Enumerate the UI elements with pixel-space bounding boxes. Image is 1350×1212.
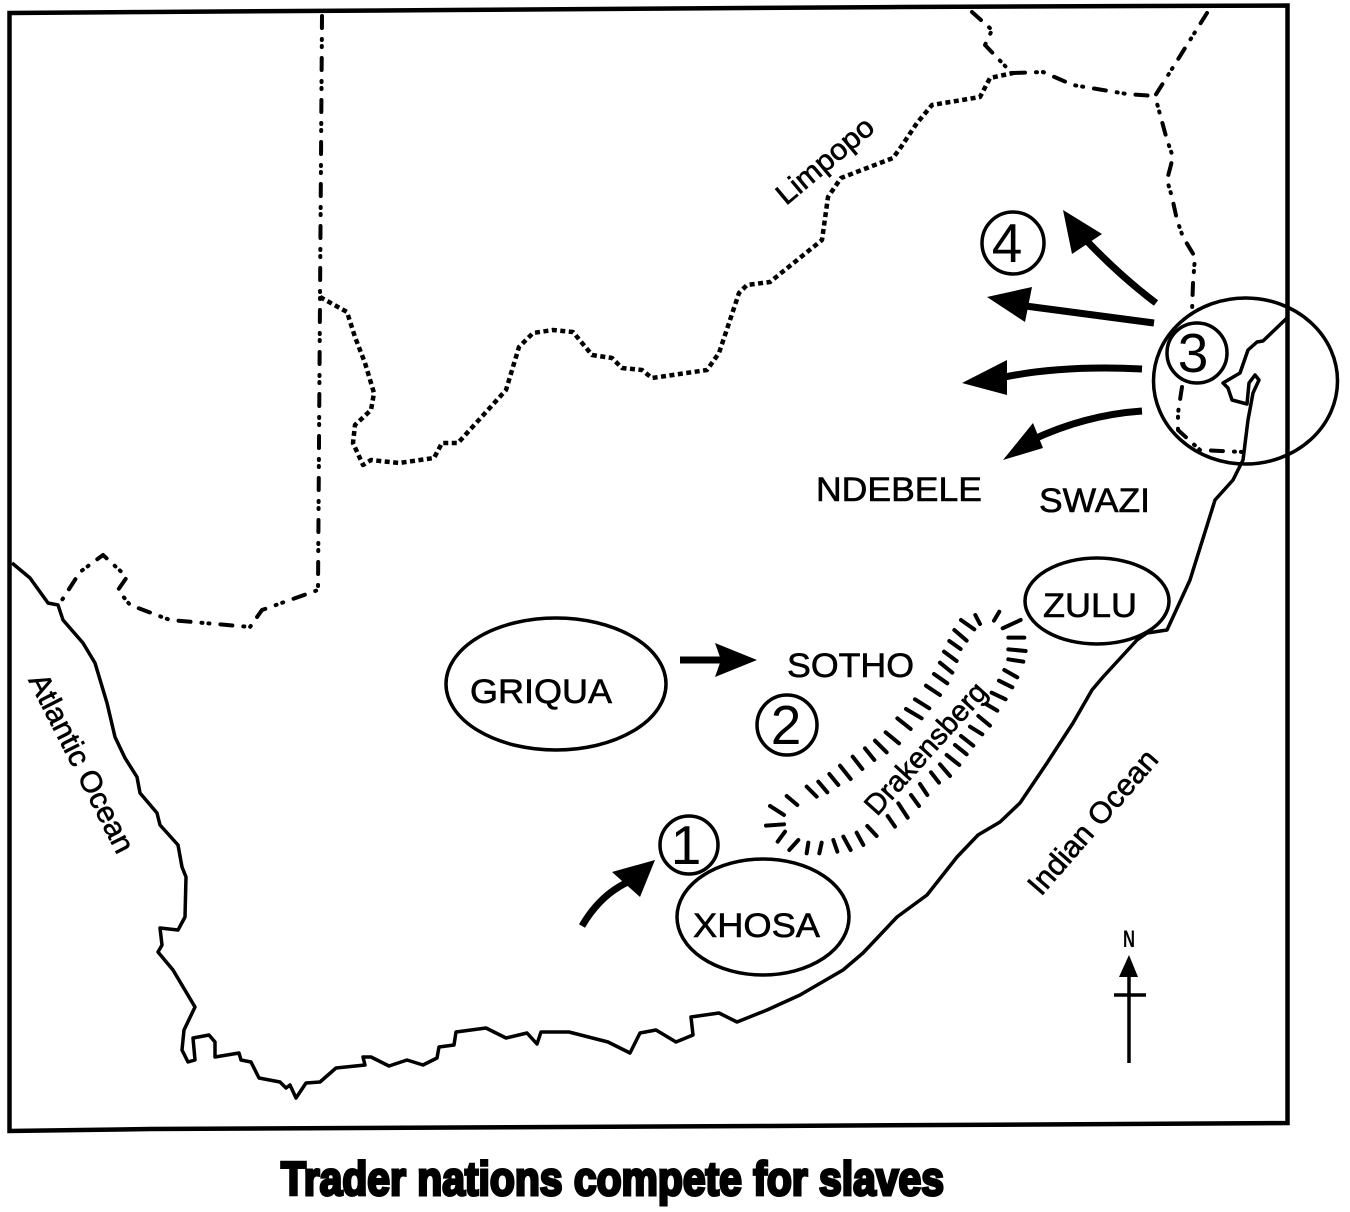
Drakensberg mountain ticks [766, 612, 1026, 853]
north arrow: N [1123, 926, 1135, 953]
arrow: toward marker 1 [582, 860, 655, 926]
coastline [12, 318, 1287, 1098]
number marker 2: 2 [771, 694, 801, 756]
arrow: southwest from marker 3 [1003, 411, 1142, 460]
title: Trader nations compete for slaves [281, 1152, 944, 1205]
nation: Griqua [446, 618, 666, 750]
nation: Xhosa: XHOSA [693, 907, 820, 945]
label: Drakensberg: Drakensberg [858, 676, 994, 822]
number marker 2 [757, 694, 817, 756]
nation: Xhosa [677, 859, 849, 975]
nation: Zulu: ZULU [1043, 587, 1137, 625]
north arrow [1114, 926, 1146, 1063]
arrow: west from marker 3 [962, 360, 1142, 395]
region circle around Delagoa Bay [1154, 298, 1338, 464]
label: Limpopo: Limpopo [770, 111, 881, 211]
Limpopo river [320, 73, 1013, 465]
number marker 1 [660, 814, 718, 876]
nation: Ndebele: NDEBELE [816, 471, 982, 509]
number marker 4 [982, 212, 1044, 274]
nation: Swazi: SWAZI [1039, 482, 1150, 520]
nation: Griqua: GRIQUA [470, 673, 612, 711]
arrow: Griqua to Sotho [680, 643, 757, 677]
nation: Zulu [1025, 558, 1169, 644]
number marker 3: 3 [1178, 322, 1208, 384]
number marker 1: 1 [671, 814, 701, 876]
national borders [62, 12, 1243, 627]
number marker 4: 4 [992, 212, 1022, 274]
nation: Sotho: SOTHO [787, 647, 914, 685]
label: Indian Ocean: Indian Ocean [1021, 743, 1165, 902]
label: Atlantic Ocean: Atlantic Ocean [22, 668, 141, 859]
arrow: northwest from marker 3 [1063, 210, 1156, 303]
number marker 3 [1167, 322, 1227, 384]
arrow: west-northwest from marker 3 [987, 287, 1154, 323]
